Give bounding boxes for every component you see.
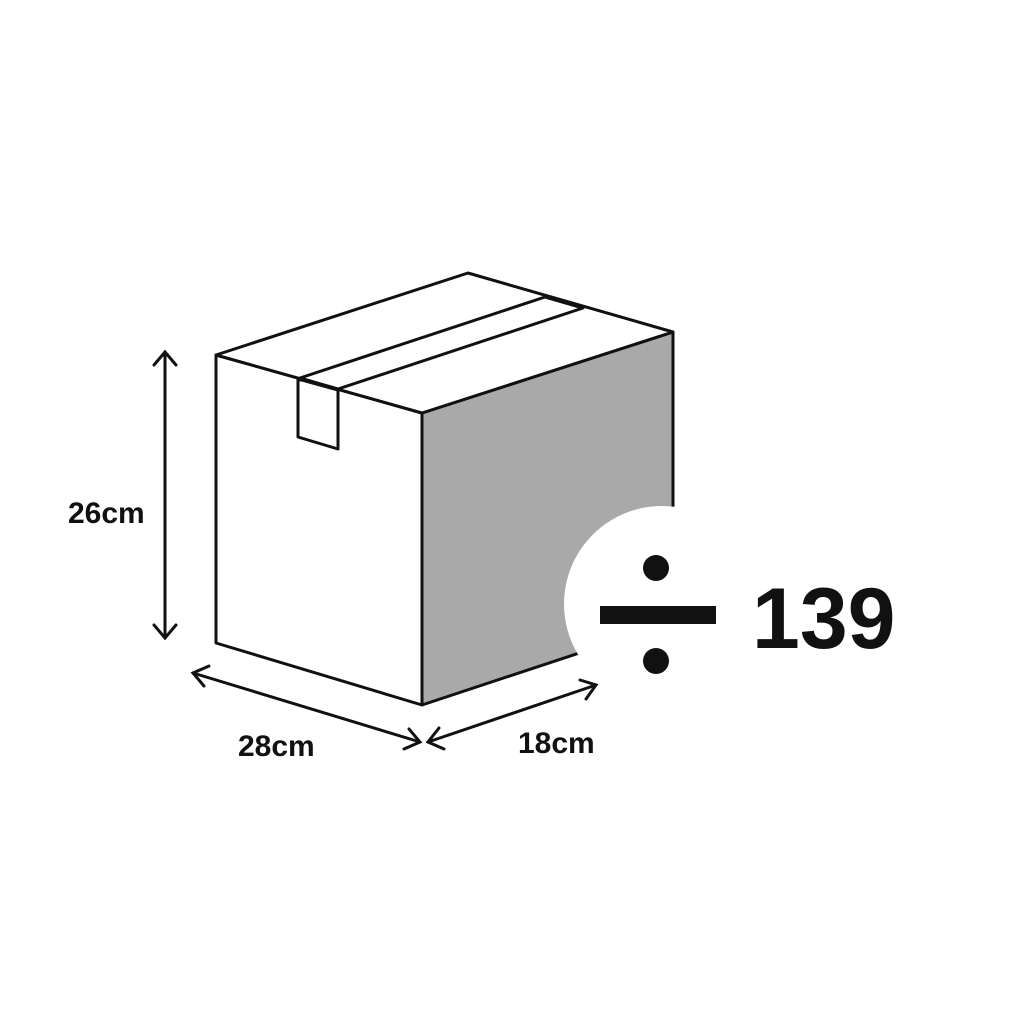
tape on top — [300, 297, 583, 389]
arrow: height — [154, 352, 176, 638]
box right face — [422, 332, 673, 705]
divide sign — [600, 555, 716, 674]
divide circle — [564, 506, 760, 702]
label 18cm: 18cm — [518, 727, 595, 760]
arrow: depth — [428, 680, 596, 749]
label 28cm: 28cm — [238, 730, 315, 763]
box front face — [216, 355, 422, 705]
tape flap — [298, 379, 338, 449]
box — [216, 273, 673, 705]
box top face — [216, 273, 673, 413]
number 139: 139 — [752, 571, 896, 667]
arrow: width — [193, 666, 420, 749]
label 26cm: 26cm — [68, 497, 145, 530]
